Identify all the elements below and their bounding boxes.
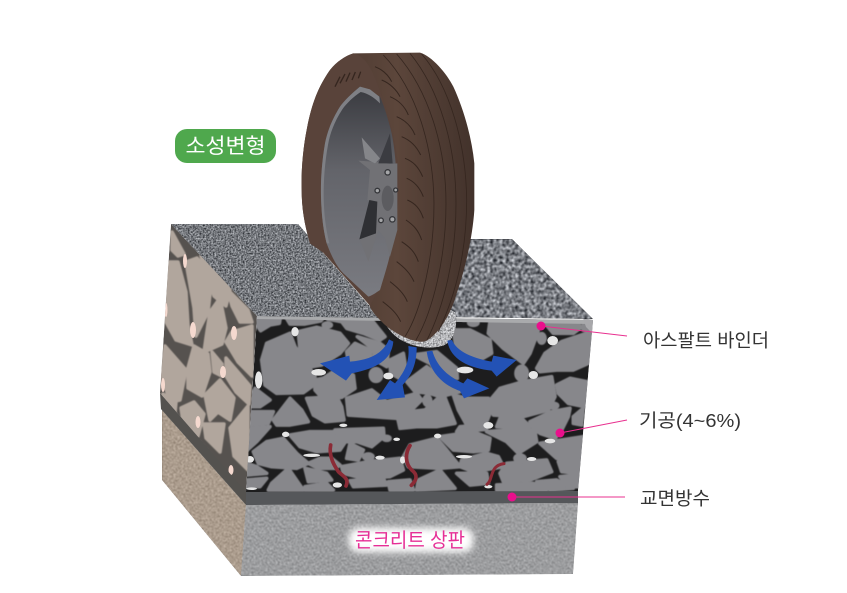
callout: asphalt binder xyxy=(536,322,769,351)
arrow: lower left xyxy=(377,346,417,400)
wheel rim xyxy=(321,87,397,297)
rim lip xyxy=(321,87,380,243)
waterproofing membrane layer xyxy=(160,393,578,505)
red reflective cracks xyxy=(330,445,504,486)
white air voids xyxy=(246,327,558,490)
blue arrows showing pushed asphalt flow xyxy=(320,339,517,400)
tire xyxy=(302,53,474,342)
sidewall xyxy=(302,53,399,305)
rutting badge: 소성변형 xyxy=(186,135,266,158)
tread pattern xyxy=(335,53,467,341)
callout: air voids xyxy=(556,410,741,438)
callout: deck waterproofing xyxy=(508,488,710,509)
aggregate stones xyxy=(247,316,593,490)
crushed asphalt around tire contact xyxy=(383,300,456,348)
arrow: lower right xyxy=(427,351,489,398)
arrow: upper left xyxy=(320,339,393,381)
wheel spokes and hub xyxy=(358,133,398,262)
asphalt front face with aggregate xyxy=(246,314,593,492)
tire outer body xyxy=(302,53,474,342)
callout: asphalt binder: 아스팔트 바인더 xyxy=(643,330,769,351)
asphalt left side face xyxy=(160,224,257,492)
asphalt top surface, left of tire xyxy=(171,224,380,318)
concrete deck block xyxy=(162,410,578,576)
right edge highlight of front face xyxy=(583,318,593,333)
rutting badge xyxy=(175,129,276,163)
callout: deck waterproofing: 교면방수 xyxy=(640,488,710,509)
arrow: upper right xyxy=(447,340,517,377)
asphalt top surface, right of tire xyxy=(440,239,593,319)
callout: air voids: 기공(4~6%) xyxy=(639,410,741,431)
concrete deck label: 콘크리트 상판 xyxy=(355,529,465,552)
crack: center xyxy=(406,446,416,485)
crack: right xyxy=(487,464,504,484)
crack: left xyxy=(330,445,347,486)
